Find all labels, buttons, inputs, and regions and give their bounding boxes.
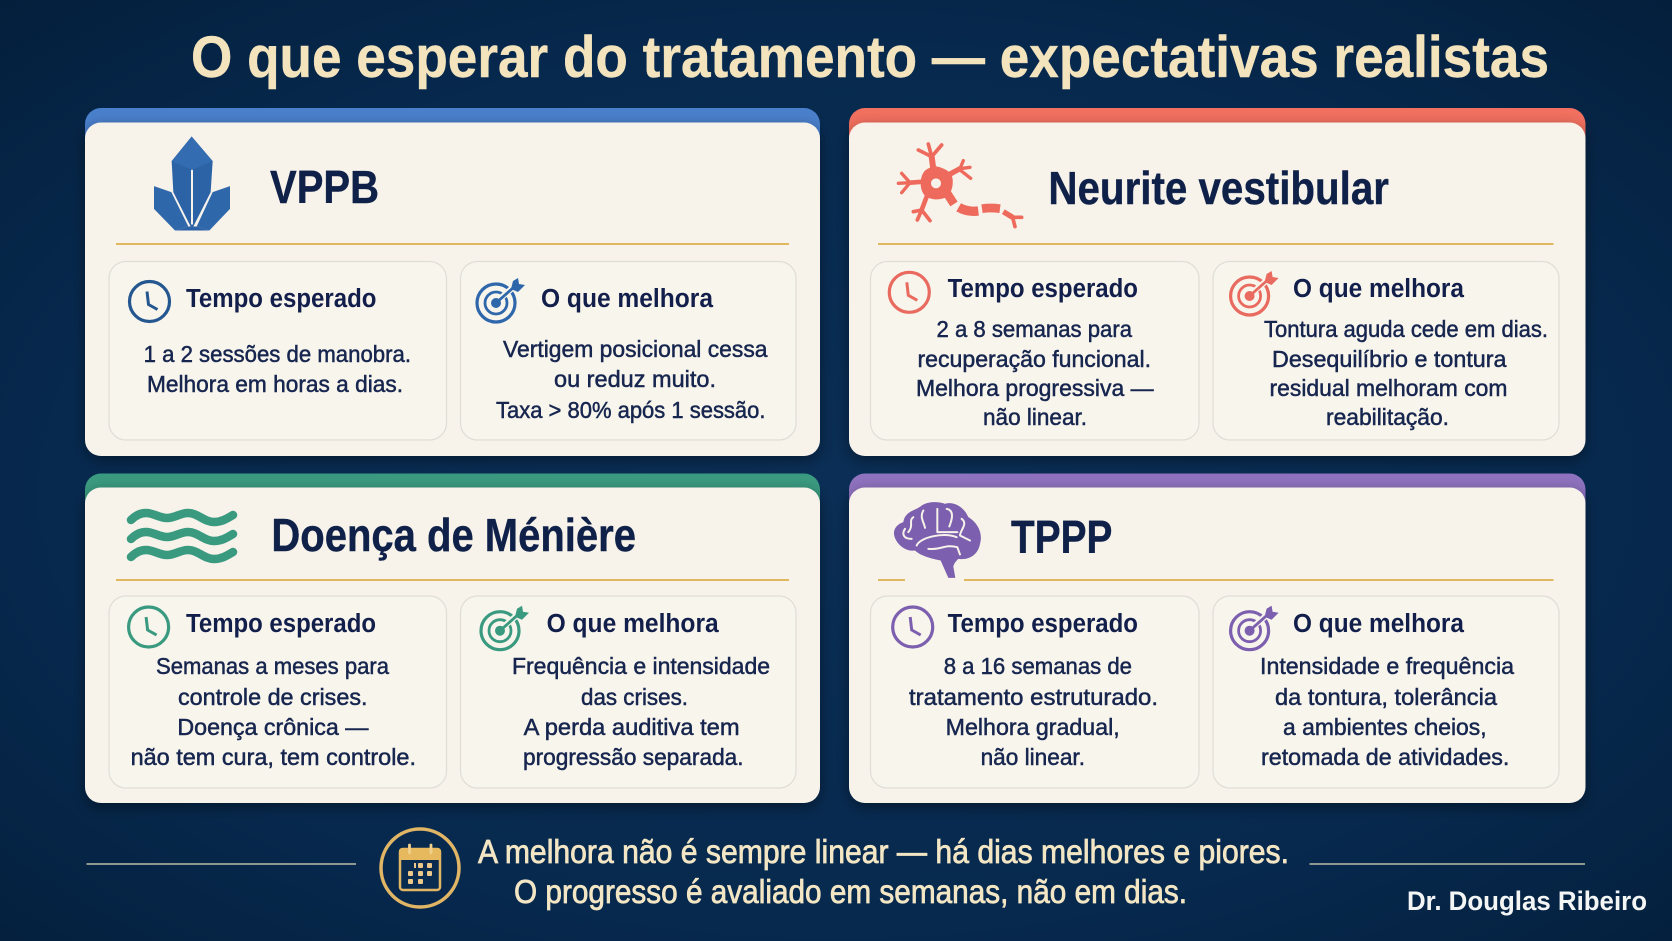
text block: 2 a 8 semanas para — [936, 316, 1132, 342]
footer message: O progresso é avaliado em semanas, não em dias. — [514, 873, 1187, 910]
sub-panel: tempo esperado — [109, 596, 446, 788]
icon: target — [1231, 271, 1279, 315]
icon: calendar — [381, 829, 459, 907]
subheading: Tempo esperado — [948, 275, 1138, 303]
icon: target — [477, 278, 525, 322]
text block: não tem cura, tem controle. — [131, 744, 416, 770]
icon: target — [1231, 606, 1279, 650]
text block: retomada de atividades. — [1261, 744, 1509, 770]
subheading: O que melhora — [541, 285, 714, 313]
sub-panel: o que melhora — [1213, 262, 1559, 440]
text block: Taxa > 80% após 1 sessão. — [496, 397, 766, 423]
text block: Vertigem posicional cessa — [503, 336, 768, 362]
panel: TPPP — [849, 474, 1586, 803]
text block: residual melhoram com — [1270, 375, 1508, 401]
icon: clock — [129, 607, 169, 647]
heading: TPPP: TPPP — [1011, 511, 1112, 563]
text block: da tontura, tolerância — [1275, 684, 1497, 710]
subheading: Tempo esperado — [948, 610, 1138, 638]
text block: Semanas a meses para — [156, 653, 389, 679]
sub-panel: o que melhora — [460, 262, 796, 440]
footer message — [478, 833, 1289, 910]
text block: não linear. — [983, 404, 1087, 430]
text block — [909, 653, 1158, 770]
text block: não linear. — [981, 744, 1085, 770]
text block: Doença crônica — — [177, 714, 368, 740]
text block — [916, 316, 1154, 430]
text block: Melhora em horas a dias. — [147, 371, 403, 397]
text block — [144, 341, 411, 397]
text block: ou reduz muito. — [554, 366, 716, 392]
footer message: A melhora não é sempre linear — há dias melhores e piores. — [478, 833, 1289, 870]
heading: Doença de Ménière: Doença de Ménière — [271, 509, 636, 561]
text block — [1260, 653, 1514, 770]
panel: Neurite vestibular — [849, 108, 1586, 456]
icon: waves — [131, 513, 233, 559]
text block — [496, 336, 768, 423]
text block: Tontura aguda cede em dias. — [1264, 316, 1548, 342]
subheading: Tempo esperado — [186, 610, 376, 638]
icon: brain — [894, 502, 981, 578]
icon: target — [481, 606, 529, 650]
text block: A perda auditiva tem — [524, 714, 740, 740]
panel: VPPB — [85, 108, 820, 456]
icon: clock — [889, 272, 929, 312]
text block — [512, 653, 770, 770]
sub-panel: tempo esperado — [870, 262, 1199, 440]
text block: Frequência e intensidade — [512, 653, 770, 679]
icon: clock — [893, 607, 933, 647]
sub-panel: tempo esperado — [109, 262, 446, 440]
text block: a ambientes cheios, — [1283, 714, 1487, 740]
text block: 8 a 16 semanas de — [944, 653, 1132, 679]
text block: reabilitação. — [1326, 404, 1449, 430]
text block: das crises. — [581, 684, 688, 710]
text block: progressão separada. — [523, 744, 744, 770]
panel: Doença de Ménière — [85, 474, 820, 803]
signature: Dr. Douglas Ribeiro — [1407, 886, 1647, 916]
title: O que esperar do tratamento — expectativas realistas — [191, 25, 1549, 90]
subheading: Tempo esperado — [186, 285, 376, 313]
text block: tratamento estruturado. — [909, 684, 1158, 710]
sub-panel: o que melhora — [1213, 596, 1559, 788]
sub-panel: tempo esperado — [870, 596, 1199, 788]
icon: clock — [130, 282, 170, 322]
subheading: O que melhora — [1293, 275, 1465, 303]
text block: 1 a 2 sessões de manobra. — [144, 341, 411, 367]
text block: Melhora progressiva — — [916, 375, 1154, 401]
text block — [131, 653, 416, 770]
sub-panel: o que melhora — [460, 596, 796, 788]
text block: Intensidade e frequência — [1260, 653, 1514, 679]
subheading: O que melhora — [1293, 610, 1465, 638]
icon: crystal — [154, 136, 230, 230]
text block: Desequilíbrio e tontura — [1272, 346, 1507, 372]
text block — [1264, 316, 1548, 430]
text block: controle de crises. — [178, 684, 368, 710]
subheading: O que melhora — [547, 610, 719, 638]
heading: Neurite vestibular: Neurite vestibular — [1048, 162, 1389, 214]
text block: Melhora gradual, — [946, 714, 1120, 740]
icon: neuron — [898, 144, 1022, 227]
text block: recuperação funcional. — [918, 346, 1151, 372]
heading: VPPB: VPPB — [270, 161, 379, 213]
